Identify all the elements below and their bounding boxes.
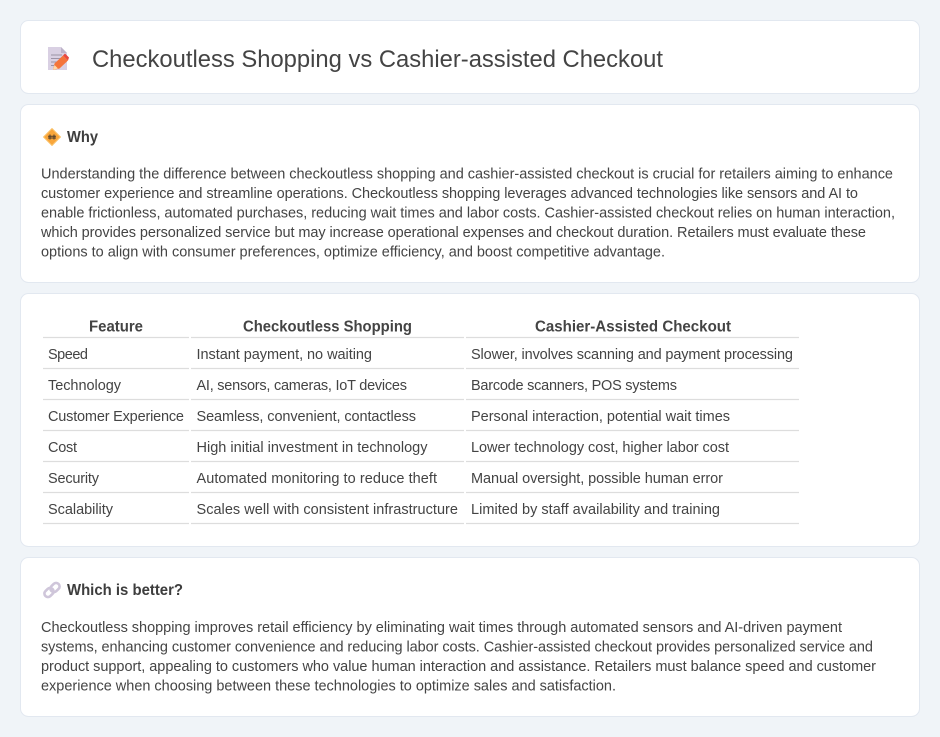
title: Checkoutless Shopping vs Cashier-assisted Checkout — [92, 46, 663, 73]
table row: scalability: Scalability — [48, 502, 114, 518]
icon: document with pencil — [48, 47, 69, 70]
table header row — [89, 318, 732, 336]
table row: customer experience: Customer Experience — [48, 409, 184, 425]
icon: link — [43, 581, 61, 599]
text block: which is better paragraph: product support, appealing to customers who value human interaction and assistance. Retailers must balance speed and customer — [41, 659, 876, 675]
panel: comparison table — [20, 294, 920, 546]
text block: which is better paragraph — [41, 620, 876, 694]
table row: cost — [48, 440, 729, 456]
table header row: Feature — [89, 318, 143, 336]
table row: speed: Instant payment, no waiting — [196, 347, 372, 363]
text block: why paragraph: customer experience and streamline operations. Checkoutless shopping leverages advanced technologies like sensors and AI to — [41, 186, 858, 202]
icon: diamond sign — [44, 128, 60, 146]
table row: security: Security — [48, 471, 100, 487]
text block: which is better paragraph: experience when choosing between these technologies to optimize sales and satisfaction. — [41, 678, 616, 694]
table row: cost: Cost — [48, 440, 77, 456]
heading: why: Why — [67, 129, 98, 146]
panel: which is better — [20, 558, 920, 716]
table row: scalability: Scales well with consistent infrastructure — [196, 502, 458, 518]
panel: why — [20, 104, 920, 282]
table row: scalability — [48, 502, 720, 518]
table row: security — [48, 471, 723, 487]
text block: why paragraph: Understanding the difference between checkoutless shopping and cashier-assisted checkout is crucial for retailers aiming to enhance — [41, 166, 893, 182]
table header row: Checkoutless Shopping — [243, 318, 412, 336]
table row: cost: High initial investment in technology — [196, 440, 428, 456]
text block: why paragraph: which provides personalized service but may increase operational expenses and checkout duration. Retailers must evaluate these — [40, 225, 866, 241]
table row: cost: Lower technology cost, higher labor cost — [471, 440, 729, 456]
text block: why paragraph: options to align with consumer preferences, optimize efficiency, and boost competitive advantage. — [41, 244, 665, 260]
table row: speed: Slower, involves scanning and payment processing — [471, 347, 793, 363]
table row: customer experience: Personal interaction, potential wait times — [471, 409, 730, 425]
table row: security: Manual oversight, possible human error — [471, 471, 723, 487]
table row: technology: AI, sensors, cameras, IoT devices — [196, 378, 407, 394]
text block: which is better paragraph: systems, enhancing customer convenience and reducing labor costs. Cashier-assisted checkout provides personalized service and — [41, 640, 873, 656]
text block: why paragraph: enable frictionless, automated purchases, reducing wait times and labor costs. Cashier-assisted checkout relies on human interaction, — [41, 206, 895, 222]
table header row: Cashier-Assisted Checkout — [535, 318, 732, 336]
table row: technology: Technology — [48, 378, 122, 394]
table row: technology — [48, 378, 677, 394]
panel: title header — [20, 20, 920, 94]
text block: which is better paragraph: Checkoutless shopping improves retail efficiency by eliminating wait times through automated sensors and AI-driven payment — [41, 620, 842, 636]
table row: speed: Speed — [48, 347, 88, 363]
heading: which is better: Which is better? — [67, 582, 183, 599]
table row: scalability: Limited by staff availability and training — [471, 502, 720, 518]
text block: why paragraph — [40, 166, 895, 260]
table row: speed — [48, 347, 793, 363]
table row: technology: Barcode scanners, POS systems — [471, 378, 677, 394]
table row: security: Automated monitoring to reduce theft — [196, 471, 437, 487]
table row: customer experience — [48, 409, 730, 425]
table row: customer experience: Seamless, convenient, contactless — [196, 409, 416, 425]
